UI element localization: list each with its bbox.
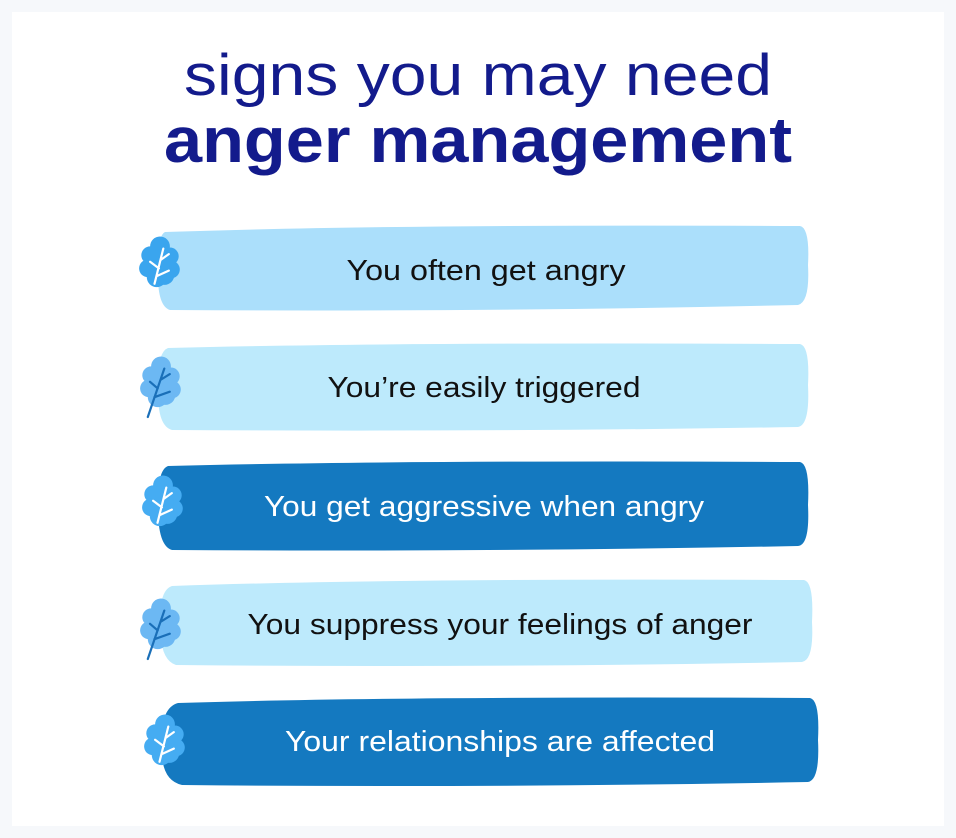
item 5 [144, 698, 818, 786]
item 5: Your relationships are affected [285, 726, 715, 758]
icon: leaf [142, 476, 183, 526]
item 3: You get aggressive when angry [264, 491, 705, 523]
icon: leaf [140, 356, 181, 417]
item 1: You often get angry [346, 255, 626, 287]
icon: leaf [144, 714, 185, 765]
item 1 [139, 226, 808, 310]
title: anger management [164, 104, 792, 176]
item 2 [140, 344, 808, 431]
icon: leaf [140, 598, 181, 659]
item 4: You suppress your feelings of anger [248, 609, 753, 641]
item 2: You’re easily triggered [328, 372, 640, 404]
title: signs you may need [184, 43, 772, 108]
icon: leaf [139, 236, 180, 287]
item 3 [142, 462, 808, 550]
item 4 [140, 580, 812, 666]
title [164, 43, 792, 176]
